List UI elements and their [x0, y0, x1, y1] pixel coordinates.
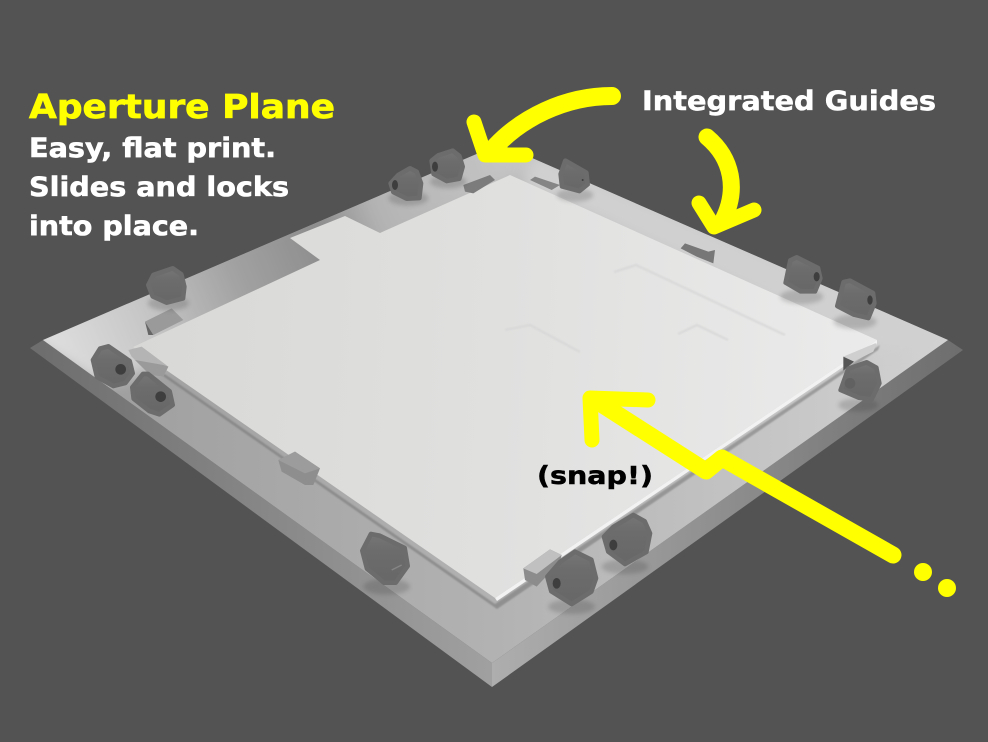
guide wedge: back right [530, 177, 560, 190]
guide wedge: right [681, 243, 715, 263]
clip: back 2 [430, 151, 467, 188]
clip: right corner [838, 362, 879, 412]
arrow: snap arrow with dots [590, 398, 956, 597]
text block: description [29, 133, 289, 242]
clip: back 3 [557, 161, 593, 202]
guides and clips, front [278, 452, 650, 614]
guides and clips, upper right [530, 161, 879, 412]
arrow: right curved yellow arrow [699, 137, 754, 227]
plate shadow line [133, 345, 880, 609]
text block: description: Easy, flat print. [29, 133, 276, 164]
guide wedge: front left [278, 452, 320, 485]
clip: back 1 [388, 168, 428, 206]
clip: left back [148, 268, 189, 311]
guides and clips, upper left [93, 151, 495, 414]
clip: front 1 [547, 552, 596, 614]
clip: front left [362, 534, 410, 595]
guide wedge: front corner [523, 549, 562, 587]
aperture plane plate [133, 175, 877, 601]
clip: front 2 [602, 515, 650, 574]
clip: right 1 [780, 257, 823, 304]
label: Integrated Guides: Integrated Guides [642, 86, 936, 117]
clip: right 2 [833, 281, 877, 329]
arrow: top-left yellow arrow [474, 96, 612, 155]
guide wedge: right corner [843, 343, 877, 371]
plate recess details [505, 265, 785, 352]
guide wedge: left [145, 308, 183, 335]
clip: left corner 1 [93, 346, 133, 386]
guide wedge: left corner [128, 347, 168, 377]
title: Aperture Plane: Aperture Plane [29, 87, 335, 126]
guide wedge: back left [463, 175, 495, 193]
base plate [20, 130, 963, 687]
text block: description: Slides and locks [29, 172, 289, 203]
text block: description: into place. [29, 211, 199, 242]
clip: left corner 2 [132, 374, 173, 414]
label: snap: (snap!) [537, 461, 653, 490]
